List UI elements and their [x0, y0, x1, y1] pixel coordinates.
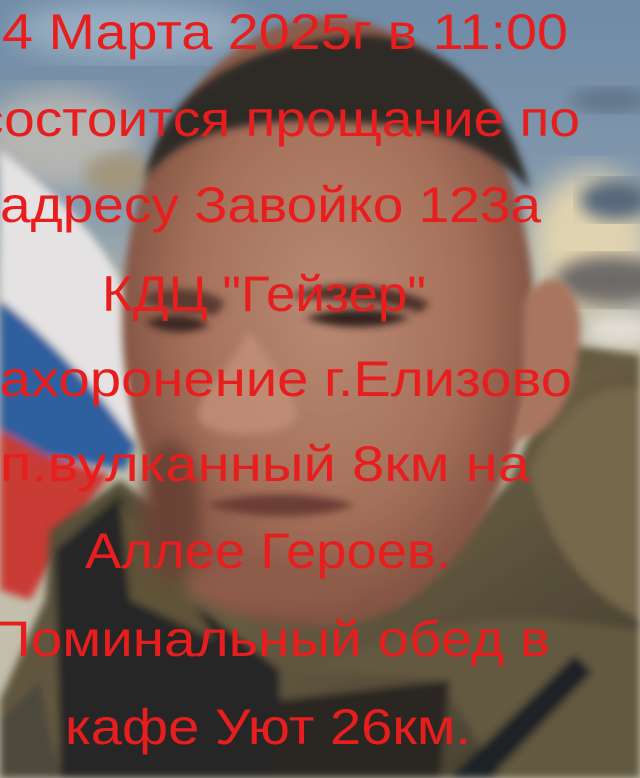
- soldier: jacket: [0, 345, 640, 778]
- soldier: facial features: [140, 285, 430, 610]
- text line: date: 4 Марта 2025г в 11:00: [2, 4, 568, 60]
- text line: address: адресу Завойко 123а: [0, 177, 541, 233]
- text line: alley: Аллее Героев.: [85, 523, 451, 579]
- soldier: neck and face: [122, 18, 580, 626]
- text line: settlement: п.вулканный 8км на: [0, 436, 530, 492]
- text line: venue: КДЦ "Гейзер": [102, 266, 426, 322]
- flag: [0, 150, 135, 600]
- text line: cafe: кафе Уют 26км.: [65, 699, 471, 755]
- text line: memorial lunch: Поминальный обед в: [0, 611, 550, 667]
